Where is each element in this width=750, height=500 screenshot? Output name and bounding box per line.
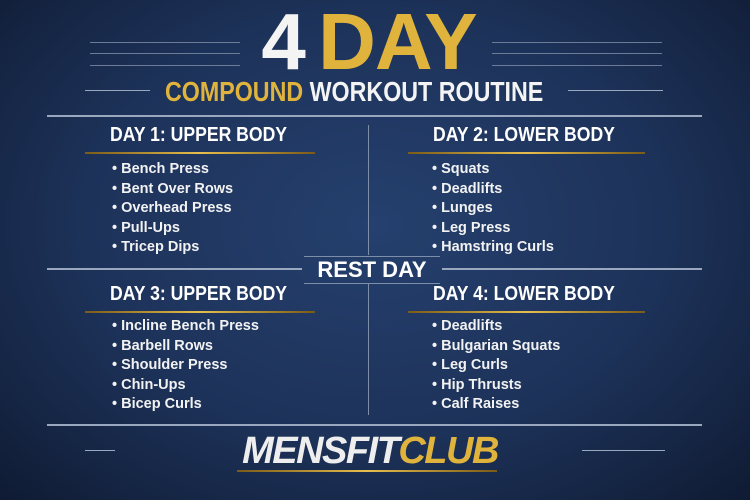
heading: DAY 3: UPPER BODY	[110, 283, 287, 305]
list: • Leg Press	[432, 220, 510, 236]
list: • Lunges	[432, 200, 493, 216]
list: • Bulgarian Squats	[432, 338, 560, 354]
list: • Calf Raises	[432, 396, 519, 412]
list	[112, 161, 233, 255]
list: • Bent Over Rows	[112, 180, 233, 196]
decorative title lines	[90, 42, 240, 66]
rest day: REST DAY	[317, 257, 427, 282]
list: • Deadlifts	[432, 318, 502, 334]
list: • Barbell Rows	[112, 338, 213, 354]
list	[432, 318, 560, 412]
list: • Overhead Press	[112, 200, 232, 216]
list: • Hamstring Curls	[432, 239, 554, 255]
list: • Tricep Dips	[112, 239, 199, 255]
subtitle: COMPOUND WORKOUT ROUTINE	[165, 76, 543, 107]
panel: day 2	[408, 124, 645, 255]
list: • Deadlifts	[432, 180, 502, 196]
list: • Chin-Ups	[112, 376, 186, 392]
list: • Shoulder Press	[112, 357, 227, 373]
list: • Bicep Curls	[112, 396, 202, 412]
panel: day 1	[85, 124, 315, 255]
heading: DAY 2: LOWER BODY	[433, 124, 615, 146]
panel: day 4	[408, 283, 645, 412]
footer logo: MENSFITCLUB	[242, 430, 498, 472]
heading: DAY 4: LOWER BODY	[433, 283, 615, 305]
list: • Bench Press	[112, 161, 209, 177]
title	[85, 0, 663, 107]
rest day	[47, 256, 702, 284]
list	[432, 161, 554, 255]
list: • Pull-Ups	[112, 220, 180, 236]
list: • Hip Thrusts	[432, 376, 522, 392]
list: • Leg Curls	[432, 357, 508, 373]
panel: day 3	[85, 283, 315, 412]
heading: DAY 1: UPPER BODY	[110, 124, 287, 146]
list	[112, 318, 259, 412]
list: • Squats	[432, 161, 489, 177]
list: • Incline Bench Press	[112, 318, 259, 334]
